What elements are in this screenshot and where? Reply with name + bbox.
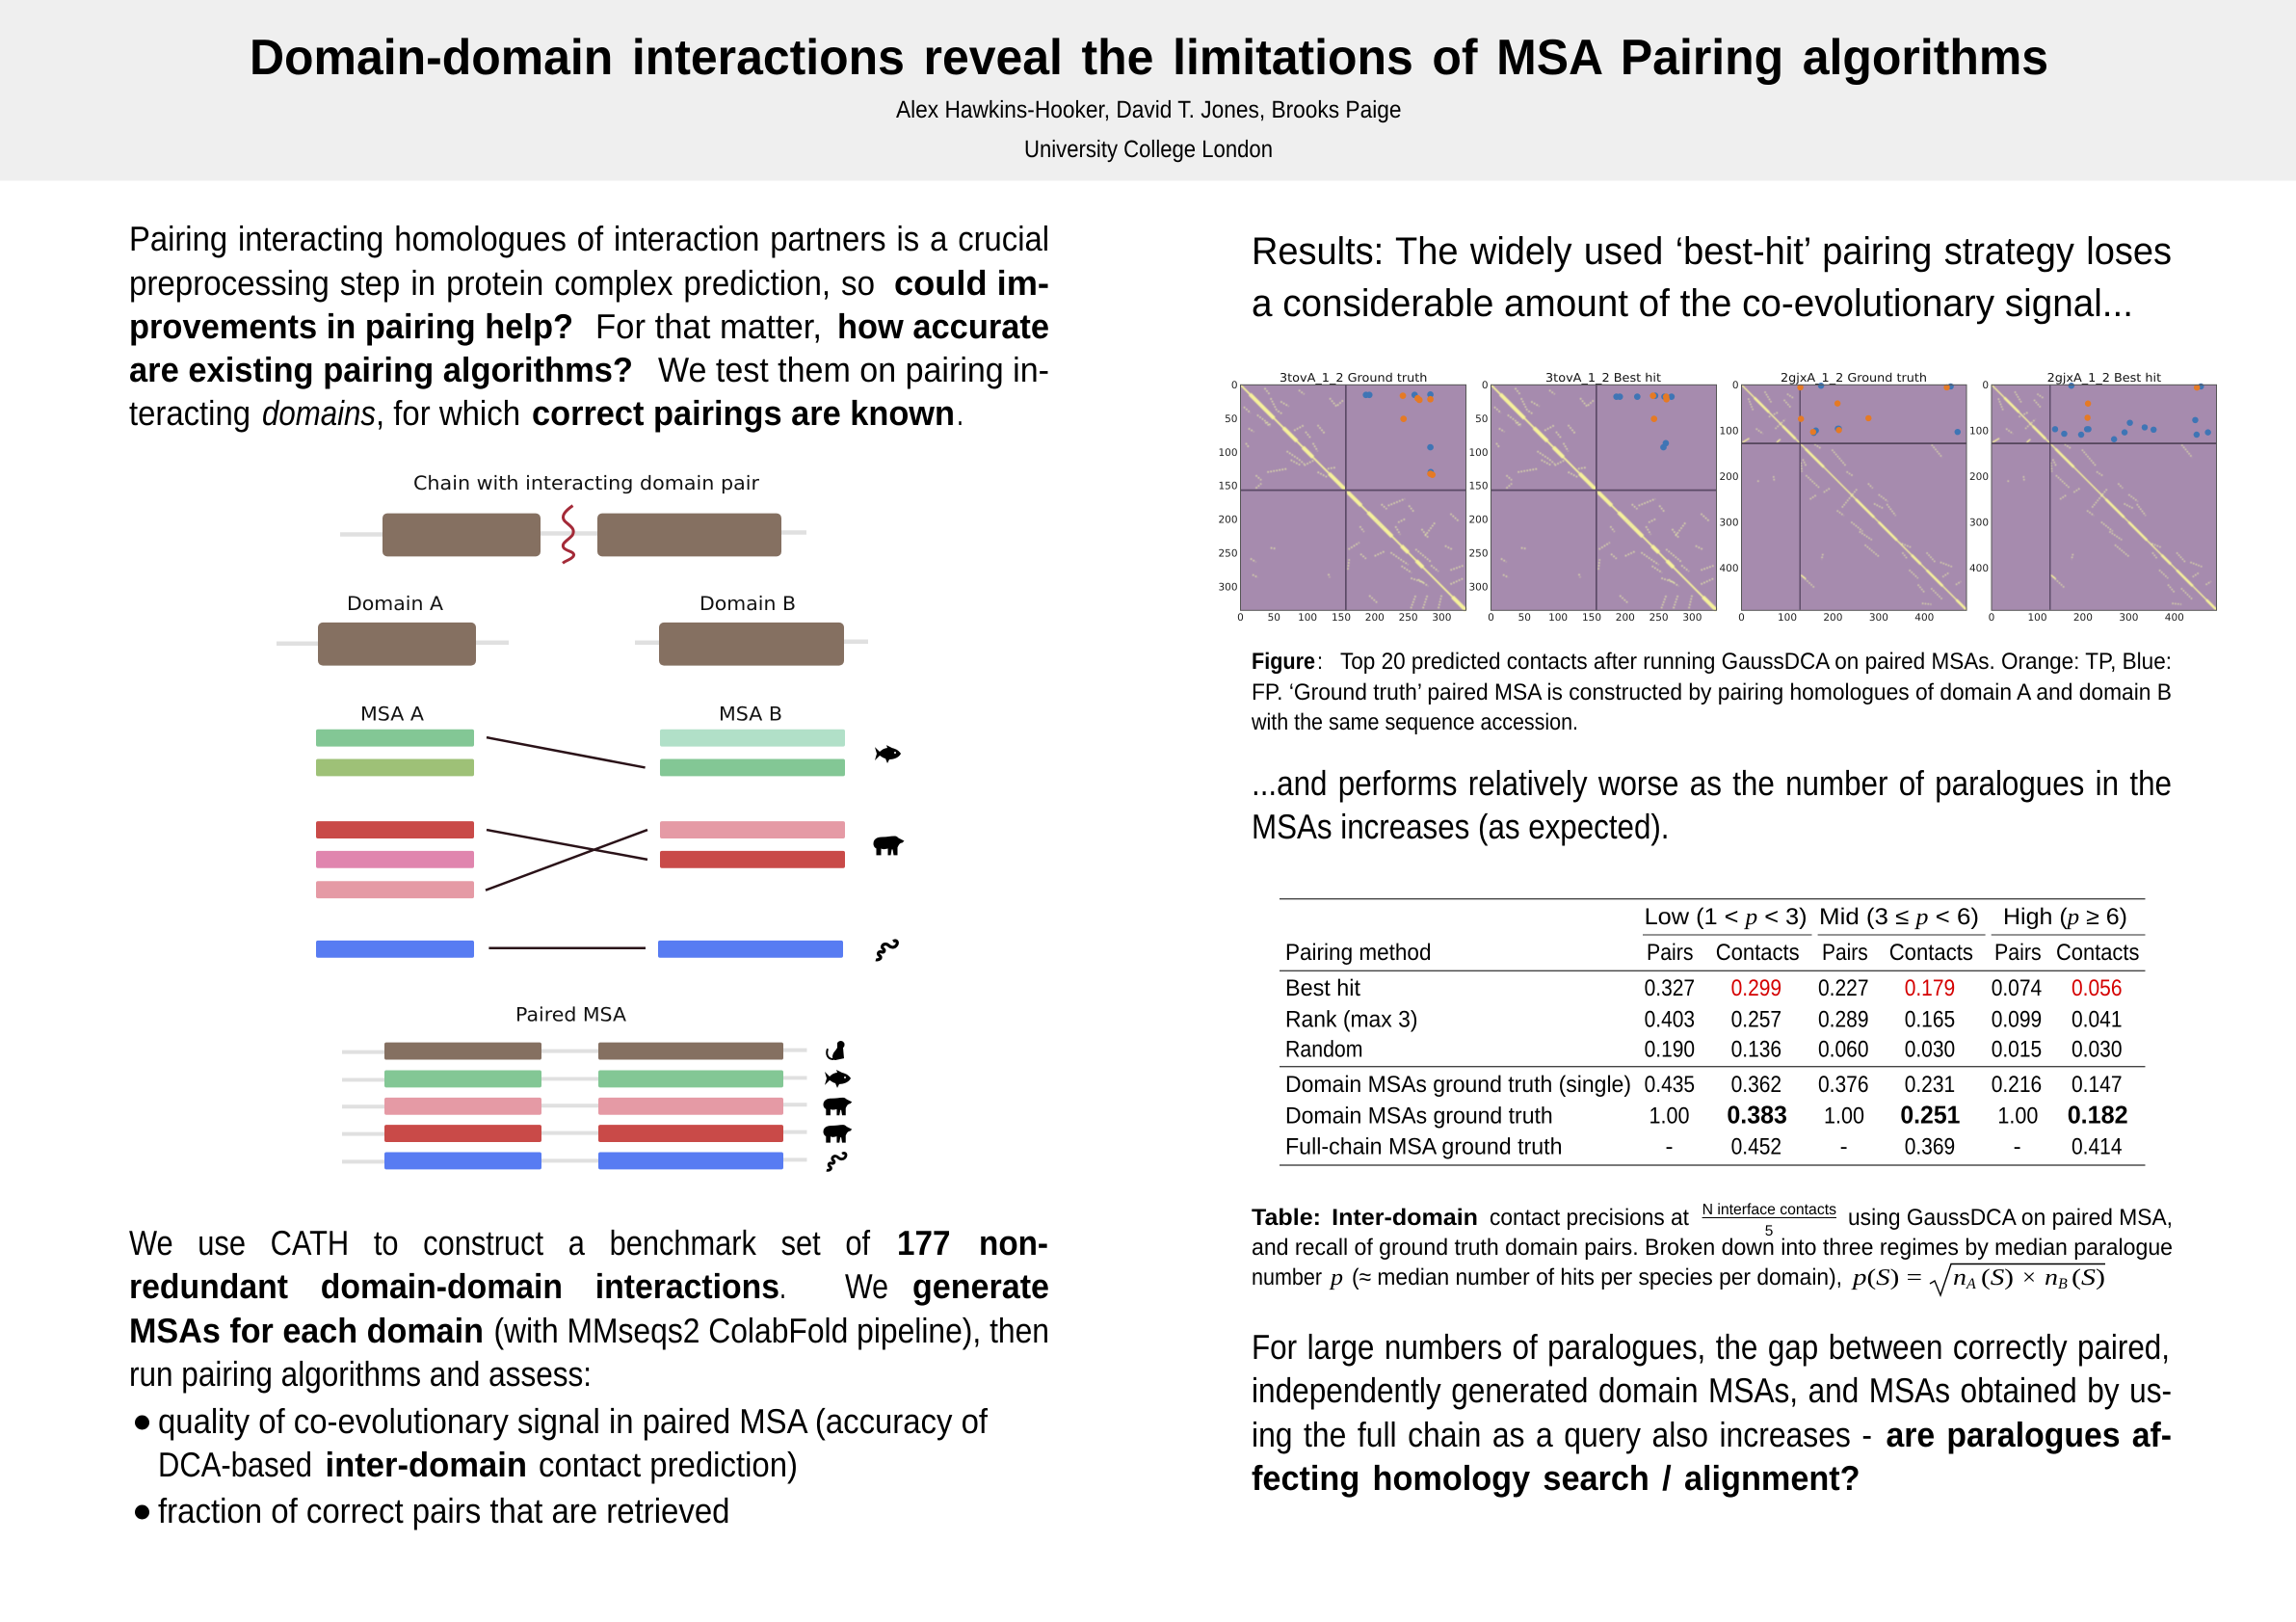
icon: monkey [827,1041,845,1060]
row: rank: 0.257 [1731,1006,1781,1033]
contact map: 2gjxA ground truth: 2gjxA_1_2 Ground truth [1781,371,1927,385]
icon: bear [873,837,904,855]
heading: results: Results: The widely used ‘best-hit’ pairing strategy loses [1252,230,2172,273]
contact map: 2gjxA best hit: 0 [1989,612,1994,624]
contact map: 3tovA ground truth: 300 [1432,612,1451,624]
contact map: 3tovA ground truth: 0 [1237,612,1244,624]
row: rank: 0.165 [1905,1006,1955,1033]
contact map: 3tovA ground truth: 250 [1218,547,1237,559]
domain B [635,592,868,666]
diagram: domain pair pairing schematic [277,471,904,1170]
contact map: 3tovA best hit: 150 [1582,612,1601,624]
row: domain MSAs ground truth single: 0.147 [2072,1072,2122,1098]
table header: Contacts [2056,940,2139,966]
icon: snake row [827,1153,846,1170]
bullet list: fraction of correct pairs that are retrieved [158,1491,730,1530]
text block: introduction [129,219,1049,433]
contact map: 2gjxA ground truth: 200 [1823,612,1842,624]
contact map: 3tovA best hit: 3tovA_1_2 Best hit [1545,371,1661,385]
row: domain MSAs ground truth: 0.251 [1900,1101,1960,1130]
chain with interacting domain pair: Chain with interacting domain pair [413,471,760,494]
bullet list: contact prediction) [539,1445,798,1484]
contact map: 2gjxA best hit: 100 [2027,612,2047,624]
contact map: 3tovA ground truth: 250 [1399,612,1418,624]
chart: contact maps [1218,371,2216,624]
table header: Pairs [1647,940,1694,966]
text block: introduction: provements in pairing help? [129,306,573,346]
contact map: 2gjxA ground truth: 300 [1869,612,1888,624]
contact map: 3tovA ground truth: 50 [1268,612,1280,624]
table bottom rule [1280,1164,2145,1166]
table header: High (p ≥ 6) [2003,904,2127,930]
contact map: 2gjxA best hit: 200 [2073,612,2093,624]
pairing lines [486,737,647,948]
bullet list: quality of co-evolutionary signal in paired MSA (accuracy of [158,1401,989,1441]
contact map: 3tovA ground truth [1218,371,1466,624]
contact map: 2gjxA best hit: 400 [1969,563,1989,574]
text block: introduction: are existing pairing algorithms? [129,350,633,389]
contact map: 3tovA best hit: 0 [1482,380,1488,391]
chain with interacting domain pair [340,471,806,563]
row: random: 0.030 [2072,1037,2122,1063]
row: domain MSAs ground truth single: 0.362 [1731,1072,1781,1098]
row: best hit: 0.179 [1905,975,1955,1001]
text block: conclusion: independently generated domain MSAs, and MSAs obtained by us- [1252,1370,2172,1410]
MSA A: MSA A [360,702,424,725]
contact map: 2gjxA ground truth: 400 [1719,563,1738,574]
table rules [1280,899,2145,1067]
header band [0,0,2296,181]
row: rank: 0.289 [1818,1006,1869,1033]
row: full-chain MSA ground truth: Full-chain MSA ground truth [1285,1133,1563,1159]
table caption: p [1329,1265,1343,1290]
bullet list [135,1401,989,1530]
row: domain MSAs ground truth single: 0.216 [1992,1072,2042,1098]
paired MSA [342,1002,807,1169]
table header: Mid (3 ≤ p < 6) [1819,904,1979,930]
contact map: 3tovA best hit: 300 [1468,582,1488,594]
row: domain MSAs ground truth single: Domain MSAs ground truth (single) [1285,1072,1631,1098]
contact map: 3tovA ground truth: 50 [1225,413,1237,425]
table caption: number [1252,1264,1322,1290]
contact map: 3tovA best hit: 200 [1468,515,1488,526]
row: best hit: 0.327 [1645,975,1695,1001]
row: random [1285,1037,2122,1063]
text block: introduction: teracting [129,393,251,433]
table caption: Table: Inter-domain [1252,1205,1478,1231]
text block: introduction: , for which [376,393,520,433]
bullet list: inter-domain [326,1445,527,1484]
contact map: 3tovA ground truth: 150 [1218,480,1237,492]
contact map: 2gjxA ground truth: 100 [1719,426,1738,438]
contact map: 3tovA best hit: 300 [1682,612,1702,624]
text block: conclusion: ing the full chain as a query also increases - [1252,1415,1872,1454]
text block: benchmark description: We [845,1266,888,1306]
figure caption: Top 20 predicted contacts after running GaussDCA on paired MSAs. Orange: TP, Blue: [1340,649,2172,675]
formula: p(S) = [1851,1265,1922,1290]
formula: n [2045,1265,2058,1290]
text block: conclusion: For large numbers of paralogues, the gap between correctly paired, [1252,1327,2170,1367]
text block: introduction: correct pairings are known [532,393,955,433]
table header: Contacts [1889,940,1973,966]
heading: results: a considerable amount of the co-evolutionary signal... [1252,282,2133,325]
text block: introduction: domains [262,393,376,433]
contact map: 3tovA ground truth: 200 [1218,515,1237,526]
row: domain MSAs ground truth: 0.383 [1727,1101,1787,1130]
contact map: 2gjxA ground truth [1719,371,1966,624]
row: domain MSAs ground truth: 1.00 [1649,1103,1690,1130]
contact map: 3tovA best hit: 250 [1468,547,1488,559]
text block: benchmark description: 177 non- [897,1223,1048,1263]
contact map: 2gjxA ground truth: 0 [1738,612,1745,624]
contact map: 3tovA ground truth: 100 [1218,447,1237,459]
row: best hit: 0.056 [2072,975,2122,1001]
row: best hit [1285,975,2122,1001]
text block: paralogues statement [1252,763,2172,846]
row: domain MSAs ground truth single: 0.435 [1645,1072,1695,1098]
contact map: 3tovA best hit: 250 [1649,612,1669,624]
contact map: 2gjxA ground truth: 100 [1778,612,1797,624]
figure caption: Figure [1252,649,1315,675]
text block: benchmark description: generate [912,1266,1049,1306]
table header [1285,904,2139,966]
table: contact precisions [1280,899,2145,1165]
figure caption: : [1317,649,1323,675]
figure caption [1251,649,2172,735]
fraction: N interface contacts [1702,1202,1836,1218]
contact map: 3tovA ground truth: 200 [1365,612,1385,624]
table header: Pairs [1994,940,2042,966]
figure caption: FP. ‘Ground truth’ paired MSA is constructed by pairing homologues of domain A and domain B [1252,679,2172,705]
contact map: 2gjxA best hit: 400 [2165,612,2184,624]
table caption: and recall of ground truth domain pairs. Broken down into three regimes by median paralogue [1252,1235,2173,1261]
text block: benchmark description: MSAs for each domain [129,1311,484,1350]
contact map: 2gjxA best hit: 0 [1982,380,1989,391]
text block: paralogues statement: MSAs increases (as expected). [1252,807,1669,846]
icon: bear row 1 [823,1098,852,1115]
contact map: 2gjxA ground truth: 200 [1719,471,1738,483]
contact map: 3tovA best hit: 50 [1518,612,1531,624]
formula: × [2022,1265,2036,1290]
table header: Contacts [1716,940,1800,966]
contact map: 3tovA best hit: 0 [1488,612,1494,624]
row: domain MSAs ground truth: Domain MSAs ground truth [1285,1103,1553,1130]
text block: introduction: how accurate [837,306,1049,346]
row: domain MSAs ground truth single: 0.376 [1818,1072,1869,1098]
contact map: 3tovA ground truth: 100 [1298,612,1317,624]
contact map: 3tovA best hit: 100 [1468,447,1488,459]
row: random: 0.136 [1731,1037,1781,1063]
title: Domain-domain interactions reveal the limitations of MSA Pairing algorithms [250,30,2048,86]
contact map: 3tovA best hit: 200 [1616,612,1635,624]
MSA A [316,702,474,958]
table header: Low (1 < p < 3) [1645,904,1808,930]
contact map: 3tovA best hit [1468,371,1717,624]
text block: benchmark description [129,1223,1049,1530]
contact map: 3tovA best hit: 50 [1475,413,1488,425]
row: best hit: 0.299 [1731,975,1781,1001]
contact map: 3tovA ground truth: 150 [1332,612,1351,624]
text block: introduction: Pairing interacting homologues of interaction partners is a crucial [129,219,1049,258]
heading: results [1252,230,2172,325]
contact map: 3tovA best hit: 150 [1468,480,1488,492]
bullet list: DCA-based [158,1445,312,1484]
row: full-chain MSA ground truth: 0.369 [1905,1133,1955,1159]
paired MSA: Paired MSA [515,1002,626,1025]
table caption [1252,1202,2173,1295]
formula: (S) [1981,1265,2014,1290]
text block: introduction: . [957,393,963,433]
formula [1851,1264,2105,1295]
row: domain MSAs ground truth [1285,1101,2128,1130]
row: rank [1285,1006,2122,1033]
row: best hit: 0.227 [1818,975,1869,1001]
contact map: 2gjxA best hit: 300 [1969,517,1989,528]
text block: benchmark description: redundant domain-domain interactions [129,1266,779,1306]
group rules [1643,934,2145,936]
text block: benchmark description: run pairing algorithms and assess: [129,1354,592,1394]
contact map: 2gjxA ground truth: 300 [1719,517,1738,528]
contact map: 2gjxA best hit: 2gjxA_1_2 Best hit [2047,371,2161,385]
contact map: 2gjxA best hit [1969,371,2216,624]
row: domain MSAs ground truth: 0.182 [2068,1101,2128,1130]
row: rank: Rank (max 3) [1285,1006,1418,1033]
text block: conclusion [1252,1327,2172,1498]
text block: introduction: For that matter, [595,306,822,346]
row: domain MSAs ground truth single [1285,1072,2122,1098]
MSA B: MSA B [719,702,782,725]
contact map: 2gjxA best hit: 100 [1969,426,1989,438]
row: full-chain MSA ground truth: 0.414 [2072,1133,2122,1159]
text block: benchmark description: We use CATH to construct a benchmark set of [129,1223,871,1263]
domain A: Domain A [347,592,443,615]
formula: B [2058,1276,2068,1292]
table header: Pairs [1822,940,1868,966]
row: rank: 0.099 [1992,1006,2042,1033]
text block: introduction: preprocessing step in protein complex prediction, so [129,263,875,303]
icon: fish [875,745,901,763]
contact map: 2gjxA best hit: 200 [1969,471,1989,483]
row: domain MSAs ground truth: 1.00 [1824,1103,1864,1130]
formula: A [1966,1276,1976,1292]
table caption: using GaussDCA on paired MSA, [1848,1205,2173,1231]
icon: bear row 2 [823,1125,852,1143]
contact map: 2gjxA ground truth: 0 [1732,380,1738,391]
fraction: 5 [1765,1223,1773,1239]
text block: introduction: We test them on pairing in- [658,350,1049,389]
row: full-chain MSA ground truth: 0.452 [1731,1133,1781,1159]
text block: paralogues statement: ...and performs relatively worse as the number of paralogues in the [1252,763,2172,803]
row: full-chain MSA ground truth [1285,1133,2122,1159]
affiliation: University College London [1024,136,1273,163]
row: full-chain MSA ground truth: - [2014,1133,2021,1159]
text block: conclusion: are paralogues af- [1887,1415,2172,1454]
row: best hit: Best hit [1285,975,1360,1001]
row: full-chain MSA ground truth: - [1665,1133,1673,1159]
row: full-chain MSA ground truth: - [1840,1133,1848,1159]
contact map: 3tovA best hit: 100 [1548,612,1568,624]
domain B: Domain B [699,592,796,615]
row: domain MSAs ground truth single: 0.231 [1905,1072,1955,1098]
fraction [1702,1202,1836,1239]
domain A [277,592,509,666]
text block: conclusion: fecting homology search / alignment? [1252,1458,1861,1498]
contact map: 2gjxA best hit: 300 [2119,612,2138,624]
row: random: 0.190 [1645,1037,1695,1063]
text block: introduction: could im- [894,263,1049,303]
row: random: Random [1285,1037,1362,1063]
row: random: 0.030 [1905,1037,1955,1063]
icon: snake [876,941,897,960]
formula: (S) [2072,1265,2105,1290]
authors: Alex Hawkins-Hooker, David T. Jones, Brooks Paige [896,96,1401,123]
table header: Pairing method [1285,940,1432,966]
contact map: 3tovA ground truth: 300 [1218,582,1237,594]
row: domain MSAs ground truth: 1.00 [1997,1103,2038,1130]
row: rank: 0.041 [2072,1006,2122,1033]
contact map: 3tovA ground truth: 0 [1231,380,1237,391]
table caption: contact precisions at [1490,1205,1689,1231]
row: rank: 0.403 [1645,1006,1695,1033]
text block: benchmark description: . [779,1266,786,1306]
row: random: 0.060 [1818,1037,1869,1063]
contact map: 3tovA ground truth: 3tovA_1_2 Ground truth [1280,371,1427,385]
contact map: 2gjxA ground truth: 400 [1914,612,1934,624]
row: best hit: 0.074 [1992,975,2042,1001]
table caption: (≈ median number of hits per species per domain), [1352,1264,1842,1290]
row: random: 0.015 [1992,1037,2042,1063]
icon: fish row [825,1070,851,1088]
figure caption: with the same sequence accession. [1251,709,1578,735]
MSA B [658,702,845,958]
formula: n [1953,1265,1966,1290]
text block: benchmark description: (with MMseqs2 ColabFold pipeline), then [493,1311,1049,1350]
